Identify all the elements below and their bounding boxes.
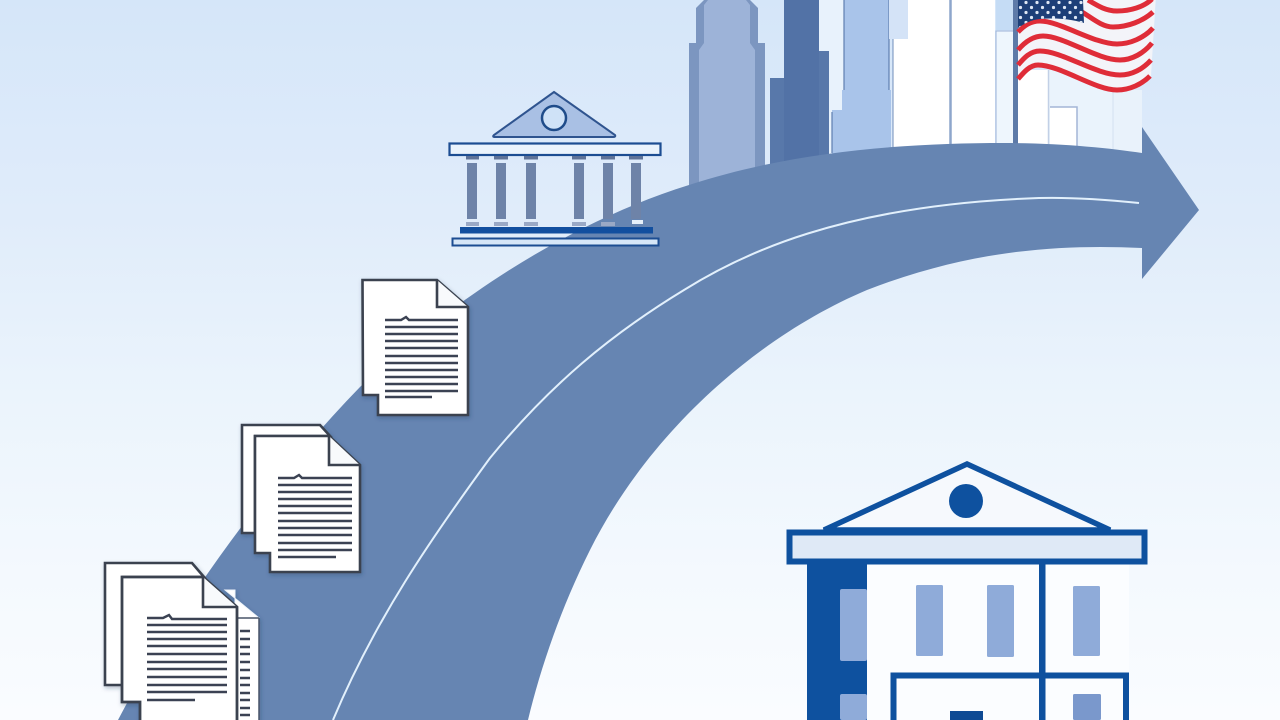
icon: small temple	[450, 92, 660, 246]
city skyline	[689, 0, 1156, 190]
back sheet	[242, 425, 330, 533]
temple entablature	[450, 144, 660, 155]
icon: single document	[362, 280, 468, 415]
front sheet	[255, 436, 360, 572]
American flag	[1018, 0, 1156, 92]
front sheet	[122, 577, 237, 720]
bank entablature	[790, 532, 1144, 562]
building: right low blocks	[1018, 70, 1142, 155]
arrow centre line	[333, 198, 1139, 720]
building: white tower	[889, 0, 1014, 150]
right back sheet	[225, 590, 259, 720]
curved arrow	[118, 127, 1199, 720]
bank body	[807, 564, 1129, 720]
building: tower three	[832, 0, 891, 155]
building: pale backdrop	[819, 0, 849, 155]
bank ground floor frame	[894, 564, 1126, 720]
icon: document stack	[105, 563, 259, 720]
building: tower one	[689, 0, 765, 190]
icon: two documents	[242, 425, 360, 572]
flagpole	[1013, 0, 1018, 150]
temple base	[452, 227, 658, 246]
icon: large bank building	[790, 464, 1144, 720]
temple roof	[493, 92, 615, 137]
temple columns	[466, 156, 643, 226]
bank roof	[824, 464, 1110, 530]
building: tower two	[770, 0, 829, 170]
left back sheet	[105, 563, 204, 685]
bank upper windows	[916, 585, 1100, 657]
